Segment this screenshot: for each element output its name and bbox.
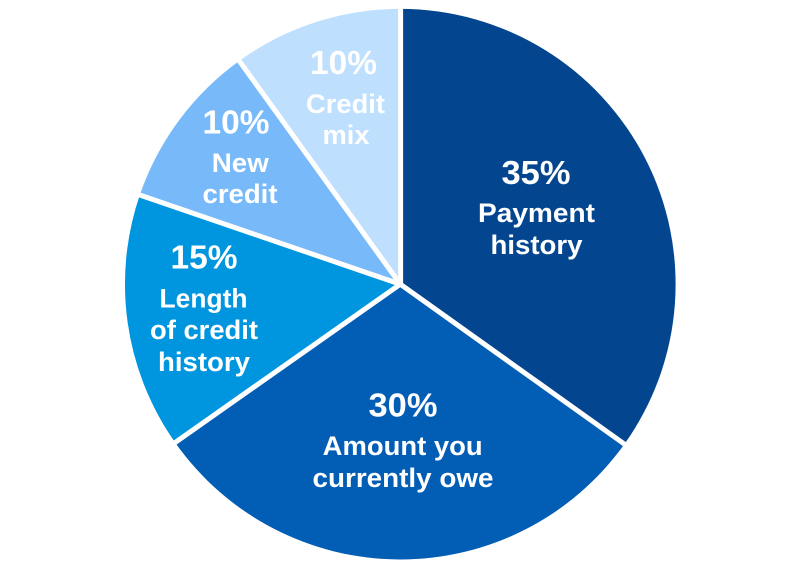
- label: payment history: [478, 154, 595, 260]
- label: length of credit history: Length: [160, 284, 248, 314]
- label: new credit: New: [212, 148, 270, 178]
- slice: new credit 10%: [140, 61, 400, 284]
- slice: payment history 35%: [401, 9, 676, 444]
- label: new credit: [202, 104, 278, 209]
- label: payment history: history: [490, 230, 582, 260]
- label: length of credit history: [150, 238, 258, 377]
- label: payment history: 35%: [502, 154, 570, 191]
- label: length of credit history: 15%: [170, 238, 238, 276]
- label: amount you currently owe: [312, 386, 494, 493]
- label: amount you currently owe: currently owe: [312, 463, 494, 493]
- label: credit mix: [306, 44, 385, 150]
- slice: credit mix 10%: [239, 9, 401, 284]
- label: amount you currently owe: Amount you: [323, 431, 483, 461]
- label: length of credit history: history: [158, 347, 250, 377]
- slice: amount you currently owe 30%: [175, 284, 624, 559]
- label: length of credit history: of credit: [150, 315, 258, 345]
- label: credit mix: mix: [322, 120, 370, 150]
- label: credit mix: 10%: [310, 44, 377, 81]
- label: new credit: credit: [202, 179, 278, 209]
- label: payment history: Payment: [478, 198, 595, 228]
- label: new credit: 10%: [202, 104, 270, 140]
- slice: length of credit history 15%: [125, 195, 400, 442]
- label: credit mix: Credit: [306, 89, 385, 119]
- label: amount you currently owe: 30%: [368, 386, 438, 424]
